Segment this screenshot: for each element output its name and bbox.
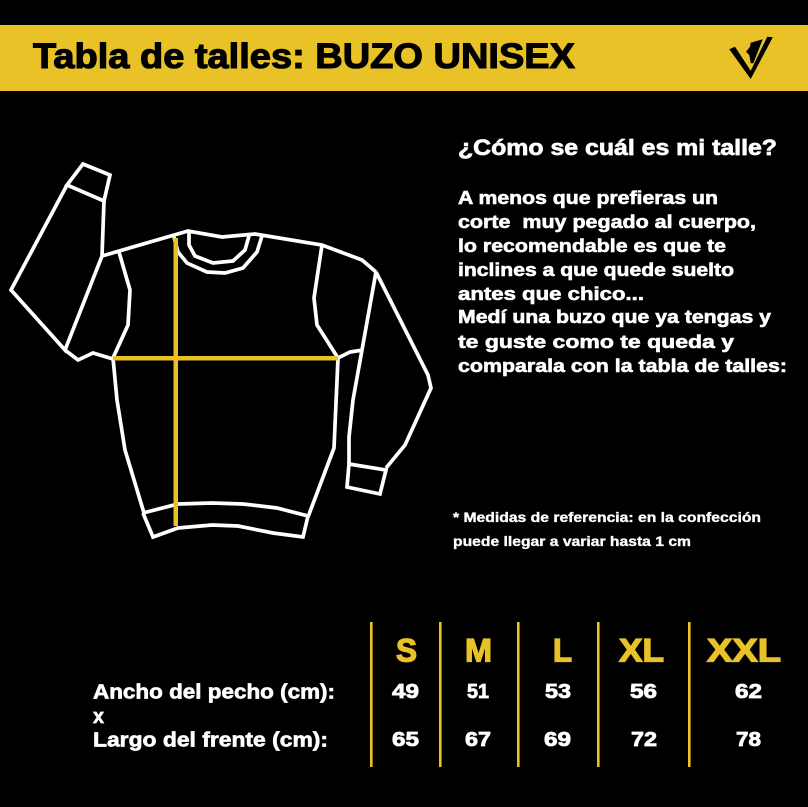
size headers: XXL (707, 632, 781, 668)
advice text block: A menos que prefieras un (458, 188, 718, 208)
advice text block (458, 188, 787, 376)
size table (93, 622, 781, 767)
size headers: L (553, 632, 572, 668)
chest width values (392, 680, 762, 703)
advice text block: te guste como te queda y (458, 332, 734, 352)
chest width values: 62 (735, 680, 762, 703)
advice text block: Medí una buzo que ya tengas y (458, 307, 771, 327)
front length values: 67 (465, 728, 491, 751)
measurement lines (113, 238, 338, 526)
size headers: M (465, 632, 492, 668)
chest width values: 51 (467, 680, 489, 703)
sweatshirt diagram (11, 164, 431, 537)
chest width values: 56 (630, 680, 657, 703)
column dividers (370, 622, 691, 767)
right sleeve (338, 272, 431, 494)
size headers (396, 632, 781, 668)
size headers: XL (619, 632, 664, 668)
advice text block: corte muy pegado al cuerpo, (458, 212, 756, 232)
row labels (93, 682, 335, 752)
chest width values: 49 (392, 680, 419, 703)
advice text block: inclines a que quede suelto (458, 260, 734, 280)
reference note (453, 510, 761, 549)
reference note: * Medidas de referencia: en la confección (453, 510, 761, 525)
left sleeve (11, 164, 113, 360)
reference note: puede llegar a variar hasta 1 cm (453, 534, 691, 549)
header banner (0, 25, 808, 91)
advice text block: antes que chico... (458, 284, 644, 304)
front length values: 65 (392, 728, 419, 751)
chest width values: 53 (545, 680, 571, 703)
title: Tabla de talles: BUZO UNISEX (33, 37, 576, 76)
collar (174, 232, 262, 273)
row labels: Largo del frente (cm): (93, 730, 328, 752)
size headers: S (396, 632, 417, 668)
icon: brand logo (729, 37, 773, 79)
sweatshirt body (102, 231, 376, 537)
row labels: Ancho del pecho (cm): (93, 682, 335, 704)
front length values: 78 (736, 728, 761, 751)
row labels: x (93, 706, 104, 728)
advice text block: comparala con la tabla de talles: (458, 356, 787, 376)
heading: how to know size: ¿Cómo se cuál es mi talle? (458, 135, 777, 160)
front length values (392, 728, 761, 751)
front length values: 69 (544, 728, 571, 751)
front length values: 72 (631, 728, 657, 751)
advice text block: lo recomendable es que te (458, 236, 726, 256)
